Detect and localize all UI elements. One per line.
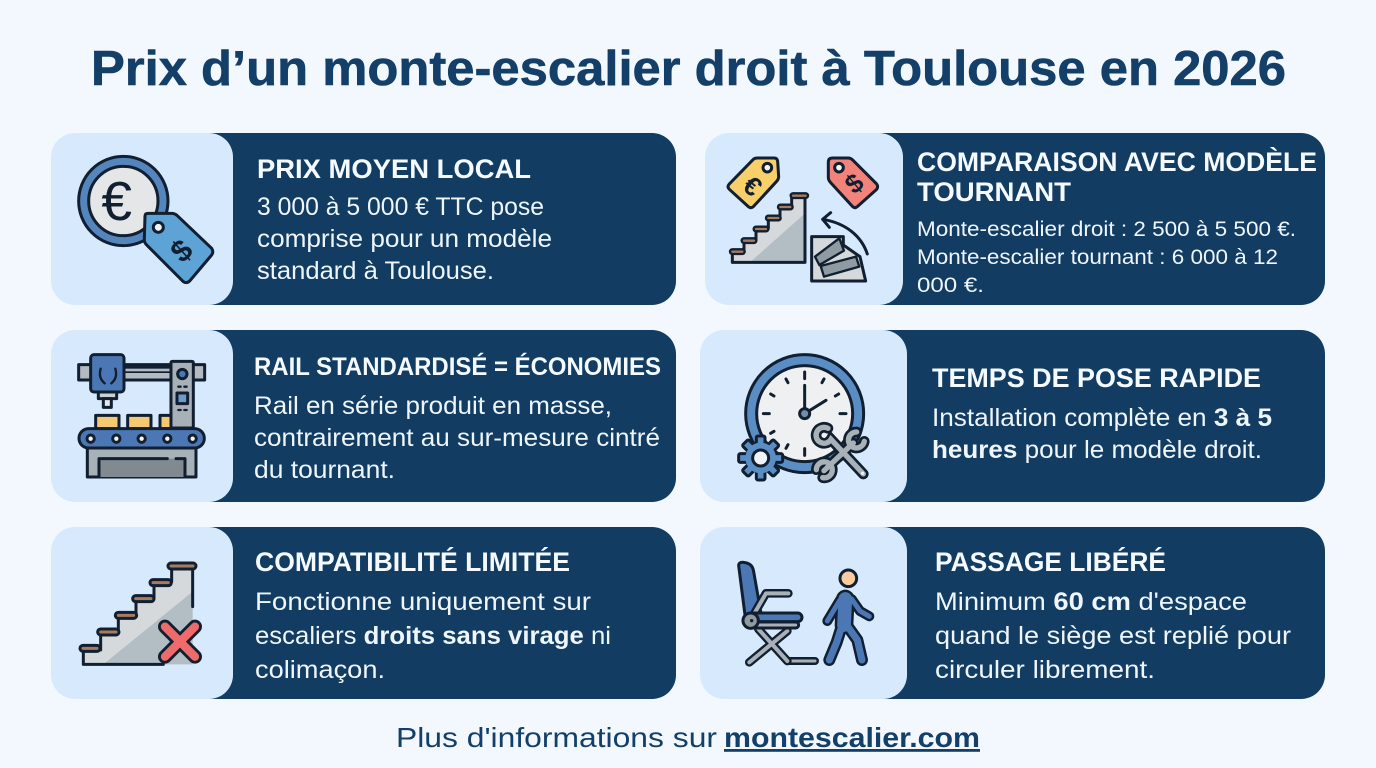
body text: du tournant.	[254, 456, 395, 484]
icon tile	[700, 330, 907, 502]
body text: standard à Toulouse.	[257, 257, 494, 285]
icon: euro coin and price tag	[79, 156, 213, 283]
footer: montescalier.com	[724, 722, 980, 753]
card background	[150, 330, 676, 502]
panel: comparaison avec modèle tournant	[705, 133, 1325, 305]
icon: stairs, price tags and arrow: €	[737, 170, 768, 203]
body text: Minimum 60 cm d'espace	[935, 588, 1247, 616]
panel: compatibilité limitée	[51, 527, 676, 699]
heading: COMPARAISON AVEC MODÈLE	[917, 146, 1317, 177]
card background	[820, 330, 1325, 502]
icon tile	[51, 527, 233, 699]
heading: PASSAGE LIBÉRÉ	[935, 546, 1166, 577]
panel: prix moyen local	[51, 133, 676, 305]
body text: heures pour le modèle droit.	[932, 436, 1262, 464]
title: Prix d’un monte-escalier droit à Toulouse en 2026	[91, 42, 1286, 96]
icon: clock with gear and tools	[739, 355, 864, 480]
body text: quand le siège est replié pour	[935, 622, 1291, 650]
body text	[254, 392, 660, 484]
heading: TEMPS DE POSE RAPIDE	[932, 363, 1261, 393]
panel: passage libéré	[700, 527, 1325, 699]
heading	[917, 146, 1317, 207]
body text	[932, 404, 1272, 464]
footer	[396, 722, 980, 753]
body text: Installation complète en 3 à 5	[932, 404, 1272, 432]
icon: stairs with red cross	[80, 563, 196, 664]
body text	[935, 588, 1291, 684]
card background	[150, 527, 676, 699]
heading: PRIX MOYEN LOCAL	[257, 154, 531, 184]
icon: euro coin and price tag: $	[164, 233, 199, 269]
body text: contrairement au sur-mesure cintré	[254, 424, 660, 452]
body text: comprise pour un modèle	[257, 225, 552, 253]
body text	[257, 193, 552, 285]
body text: 000 €.	[917, 273, 984, 297]
panel: temps de pose rapide	[700, 330, 1325, 502]
icon: stairs, price tags and arrow: $	[839, 167, 870, 200]
body text: circuler librement.	[935, 656, 1155, 684]
heading: COMPATIBILITÉ LIMITÉE	[255, 546, 570, 577]
icon: factory machine with conveyor	[79, 355, 205, 477]
body text: Rail en série produit en masse,	[254, 392, 612, 420]
icon tile	[700, 527, 907, 699]
icon tile	[705, 133, 903, 305]
body text: colimaçon.	[255, 656, 385, 684]
heading: TOURNANT	[917, 177, 1072, 207]
card background	[820, 133, 1325, 305]
icon: stairs, price tags and arrow	[728, 158, 878, 281]
card background	[150, 133, 676, 305]
body text: Monte-escalier tournant : 6 000 à 12	[917, 245, 1278, 269]
icon tile	[51, 133, 233, 305]
body text: escaliers droits sans virage ni	[255, 622, 611, 650]
body text: 3 000 à 5 000 € TTC pose	[257, 193, 544, 221]
card background	[820, 527, 1325, 699]
body text: Fonctionne uniquement sur	[255, 588, 591, 616]
icon: folded chair and walking person	[739, 562, 869, 662]
icon tile	[51, 330, 233, 502]
body text: Monte-escalier droit : 2 500 à 5 500 €.	[917, 217, 1296, 241]
panel: rail standardisé	[51, 330, 676, 502]
icon: euro coin and price tag: €	[101, 170, 132, 232]
heading: RAIL STANDARDISÉ = ÉCONOMIES	[254, 352, 661, 381]
body text	[917, 217, 1296, 297]
footer: Plus d'informations sur	[396, 722, 717, 753]
body text	[255, 588, 611, 684]
